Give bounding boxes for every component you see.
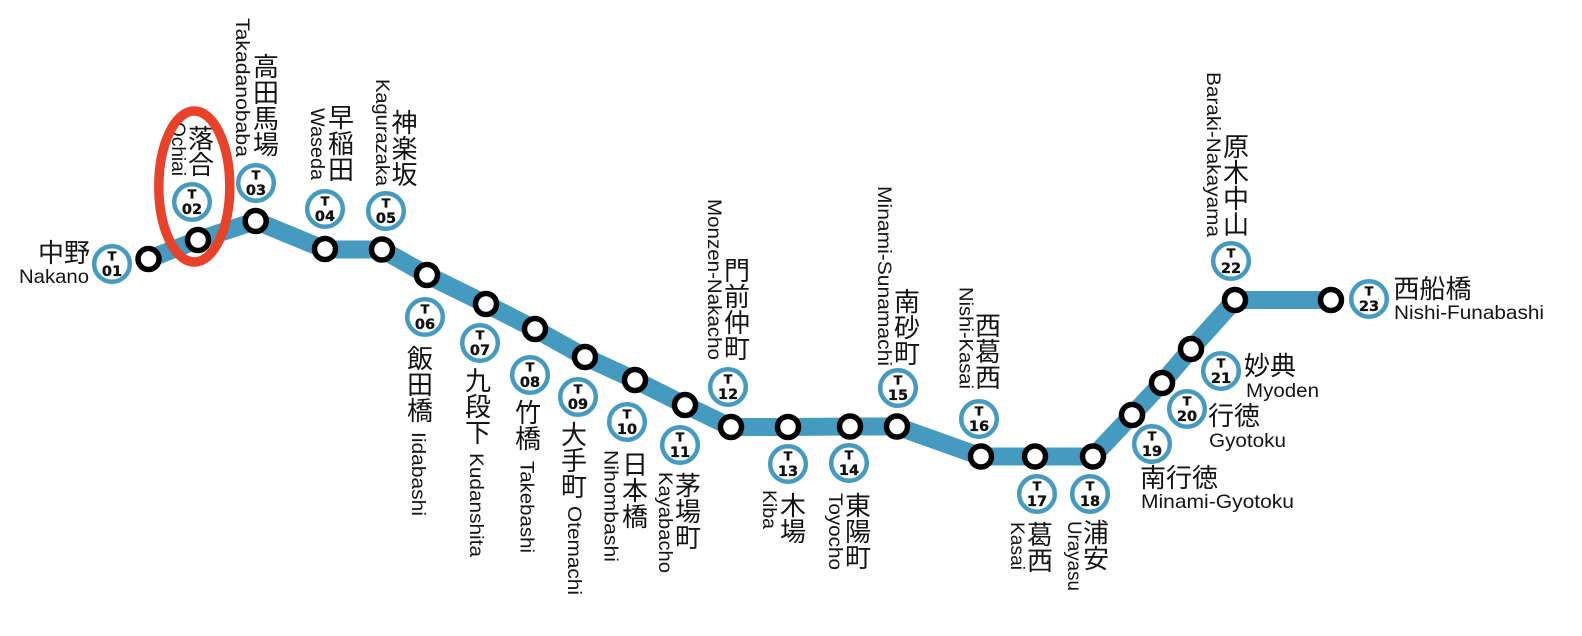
station T05 Kagurazaka: Kagurazaka — [371, 79, 393, 186]
station T13 Kiba: 13 — [778, 464, 798, 480]
station T05 Kagurazaka: 神楽坂 — [388, 109, 418, 187]
station T16 Nishi-Kasai: 西葛西 — [972, 312, 1002, 390]
station T01 Nakano: 01 — [102, 264, 122, 280]
station T15 Minami-Sunamachi: Minami-Sunamachi — [873, 186, 895, 366]
station T08 Takebashi: 08 — [520, 375, 540, 391]
station T20 Gyotoku: 20 — [1177, 409, 1197, 425]
station T02 Ochiai: 02 — [182, 202, 202, 218]
station T22 Baraki-Nakayama: 原木中山 — [1220, 133, 1250, 237]
station T01 Nakano: 中野 — [38, 238, 90, 268]
station T23 Nishi-Funabashi: 西船橋 — [1394, 274, 1472, 304]
station T21 Myoden: 妙典 — [1244, 351, 1296, 381]
station T01 Nakano: Nakano — [19, 266, 89, 288]
station T05 Kagurazaka — [368, 79, 418, 260]
station T02 Ochiai — [167, 122, 214, 250]
station T10 Nihombashi: Nihombashi — [600, 450, 622, 562]
station T01 Nakano: T — [108, 248, 117, 264]
station T17 Kasai — [1006, 446, 1055, 573]
station T14 Toyocho: 東陽町 — [842, 492, 872, 570]
station T15 Minami-Sunamachi: T — [894, 372, 903, 388]
station T11 Kayabacho: T — [676, 430, 685, 444]
station T18 Urayasu: 18 — [1080, 494, 1100, 510]
station T20 Gyotoku: Gyotoku — [1209, 430, 1286, 452]
station T06 Iidabashi — [404, 264, 443, 516]
station T21 Myoden — [1180, 338, 1319, 402]
station T14 Toyocho: 14 — [839, 463, 859, 479]
station T20 Gyotoku: 行徳 — [1208, 401, 1260, 431]
station T06 Iidabashi: 飯田橋 — [404, 345, 434, 423]
station T14 Toyocho: T — [845, 448, 854, 462]
station T09 Otemachi: Otemachi — [563, 506, 585, 595]
station T18 Urayasu: Urayasu — [1063, 521, 1085, 591]
station T03 Takadanobaba: 03 — [246, 183, 266, 199]
station T19 Minami-Gyotoku: Minami-Gyotoku — [1141, 491, 1294, 513]
station T03 Takadanobaba: Takadanobaba — [231, 18, 253, 157]
station T09 Otemachi: T — [574, 382, 583, 396]
station T08 Takebashi: 竹橋 — [512, 399, 542, 451]
station T08 Takebashi: T — [526, 360, 535, 374]
station T22 Baraki-Nakayama: Baraki-Nakayama — [1202, 72, 1224, 237]
station T04 Waseda: 早稲田 — [324, 104, 354, 182]
station T07 Kudanshita: Kudanshita — [465, 453, 487, 557]
station T10 Nihombashi: 10 — [617, 422, 637, 438]
station T20 Gyotoku — [1152, 372, 1286, 452]
station T21 Myoden: Myoden — [1246, 380, 1319, 402]
station T12 Monzen-Nakacho — [703, 199, 750, 438]
station T19 Minami-Gyotoku: 19 — [1142, 444, 1162, 460]
station T03 Takadanobaba: 高田馬場 — [250, 53, 280, 157]
station T13 Kiba: 木場 — [776, 492, 806, 544]
station T09 Otemachi: 大手町 — [558, 421, 588, 499]
station T11 Kayabacho: 11 — [670, 445, 690, 461]
station T15 Minami-Sunamachi: 15 — [888, 388, 908, 404]
station T18 Urayasu — [1063, 446, 1110, 591]
station T02 Ochiai: 落合 — [184, 125, 214, 177]
station T10 Nihombashi: 日本橋 — [618, 451, 648, 529]
station T11 Kayabacho: Kayabacho — [654, 472, 676, 573]
station T22 Baraki-Nakayama — [1202, 72, 1250, 310]
station T16 Nishi-Kasai: T — [975, 404, 984, 418]
station T08 Takebashi — [512, 318, 548, 553]
station T12 Monzen-Nakacho: Monzen-Nakacho — [703, 199, 725, 360]
station T16 Nishi-Kasai — [954, 287, 1002, 467]
station T05 Kagurazaka: T — [382, 196, 391, 210]
station T06 Iidabashi: Iidabashi — [407, 432, 429, 516]
station T23 Nishi-Funabashi: T — [1365, 284, 1374, 298]
station T03 Takadanobaba: T — [252, 168, 261, 182]
station T18 Urayasu: 浦安 — [1080, 519, 1110, 571]
station T23 Nishi-Funabashi — [1320, 274, 1544, 324]
station T21 Myoden: T — [1217, 356, 1226, 370]
station T14 Toyocho: Toyocho — [824, 493, 846, 570]
station T23 Nishi-Funabashi: Nishi-Funabashi — [1394, 302, 1544, 324]
station T03 Takadanobaba — [231, 18, 280, 232]
station T10 Nihombashi — [600, 370, 648, 562]
station T22 Baraki-Nakayama: T — [1227, 246, 1236, 260]
station T06 Iidabashi: 06 — [415, 317, 435, 333]
station T23 Nishi-Funabashi: 23 — [1359, 299, 1379, 315]
station T17 Kasai: T — [1033, 478, 1042, 494]
station T09 Otemachi — [558, 346, 596, 595]
station T14 Toyocho — [824, 416, 872, 570]
station T15 Minami-Sunamachi — [873, 186, 920, 437]
station T12 Monzen-Nakacho: T — [724, 372, 733, 386]
station T17 Kasai: Kasai — [1006, 522, 1028, 570]
station T04 Waseda: Waseda — [306, 108, 328, 180]
station T17 Kasai: 17 — [1027, 494, 1047, 510]
station T11 Kayabacho: 茅場町 — [672, 472, 702, 550]
station T22 Baraki-Nakayama: 22 — [1221, 261, 1241, 277]
station T12 Monzen-Nakacho: 12 — [718, 387, 738, 403]
station T08 Takebashi: Takebashi — [516, 461, 538, 553]
station T07 Kudanshita: T — [476, 328, 485, 342]
station T13 Kiba — [758, 416, 806, 544]
route line — [148, 221, 1331, 456]
station T20 Gyotoku: T — [1183, 394, 1192, 408]
station T04 Waseda: 04 — [315, 209, 335, 225]
station T21 Myoden: 21 — [1211, 371, 1231, 387]
red highlight ellipse around Ochiai — [159, 111, 230, 262]
station T09 Otemachi: 09 — [568, 397, 588, 413]
station T19 Minami-Gyotoku — [1122, 404, 1294, 513]
station T19 Minami-Gyotoku: 南行徳 — [1140, 463, 1218, 493]
station T02 Ochiai: Ochiai — [167, 122, 189, 176]
station T13 Kiba: T — [784, 448, 793, 464]
station T04 Waseda — [306, 104, 354, 260]
station T13 Kiba: Kiba — [758, 490, 780, 529]
station T07 Kudanshita: 07 — [470, 343, 490, 359]
station T07 Kudanshita: 九段下 — [462, 367, 492, 445]
station T15 Minami-Sunamachi: 南砂町 — [890, 288, 920, 366]
station T12 Monzen-Nakacho: 門前仲町 — [720, 257, 750, 361]
station T16 Nishi-Kasai: 16 — [969, 419, 989, 435]
station T18 Urayasu: T — [1086, 478, 1095, 494]
station T17 Kasai: 葛西 — [1024, 521, 1054, 573]
station T04 Waseda: T — [321, 194, 330, 208]
station T07 Kudanshita — [462, 294, 498, 557]
station T10 Nihombashi: T — [623, 406, 632, 422]
station T06 Iidabashi: T — [421, 302, 430, 316]
station T19 Minami-Gyotoku: T — [1148, 428, 1157, 444]
station T16 Nishi-Kasai: Nishi-Kasai — [954, 287, 976, 389]
station T02 Ochiai: T — [188, 186, 197, 202]
station T01 Nakano — [19, 238, 159, 288]
station T11 Kayabacho — [654, 394, 702, 573]
station T05 Kagurazaka: 05 — [376, 211, 396, 227]
